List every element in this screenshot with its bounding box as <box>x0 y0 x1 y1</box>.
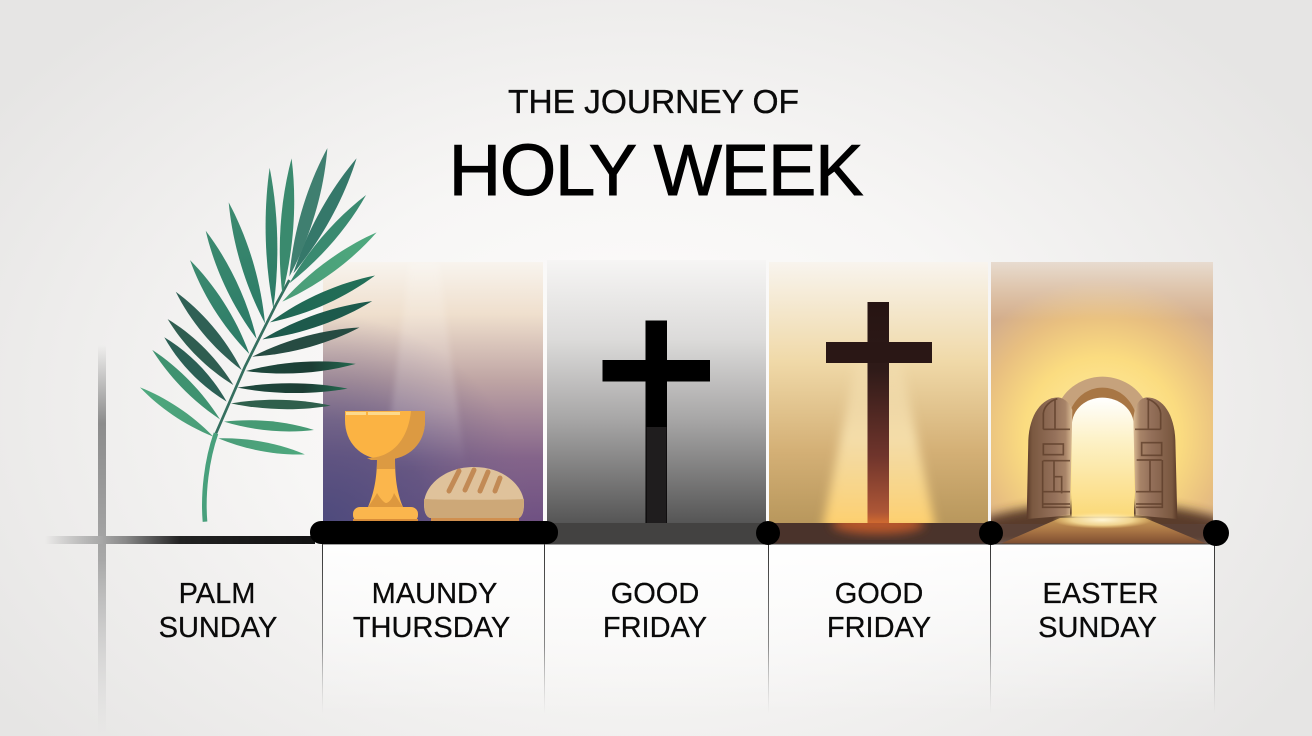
icon: palm branch <box>137 146 380 522</box>
label: Easter Sunday: EASTER <box>1042 578 1159 610</box>
label: Palm Sunday <box>159 578 277 644</box>
panel: Good Friday light <box>769 262 988 530</box>
label: Good Friday: GOOD <box>611 578 699 610</box>
timeline dot: Good Friday end <box>979 521 1003 545</box>
icon: bread loaf <box>424 467 524 523</box>
icon: open tomb doors <box>1027 377 1177 529</box>
title <box>449 84 863 211</box>
column tick lines <box>322 544 1215 714</box>
panel: Good Friday dark <box>547 260 766 524</box>
timeline dot: Easter end <box>1203 520 1229 546</box>
timeline dot: Good Friday <box>756 521 780 545</box>
label: Palm Sunday: SUNDAY <box>159 612 277 644</box>
floor glow <box>1052 511 1152 529</box>
vertical axis line <box>98 345 106 736</box>
panel: Easter Sunday <box>985 262 1220 548</box>
label: Maundy Thursday <box>353 578 510 644</box>
label: Good Friday second <box>827 578 931 644</box>
title: THE JOURNEY OF <box>508 84 799 121</box>
door right <box>1133 397 1177 519</box>
timeline lead line <box>45 536 315 544</box>
label: Good Friday second: FRIDAY <box>827 612 931 644</box>
label: Palm Sunday: PALM <box>179 578 255 610</box>
label: Good Friday <box>603 578 707 644</box>
icon: black cross <box>602 320 710 524</box>
label: Good Friday second: GOOD <box>835 578 923 610</box>
timeline base strips <box>322 523 1210 544</box>
title: HOLY WEEK <box>449 130 863 211</box>
icon: chalice <box>345 411 425 523</box>
label: Easter Sunday: SUNDAY <box>1038 612 1157 644</box>
label: Easter Sunday <box>1038 578 1159 644</box>
timeline thick segment <box>310 521 558 544</box>
label: Good Friday: FRIDAY <box>603 612 707 644</box>
label: Maundy Thursday: MAUNDY <box>372 578 497 610</box>
door left <box>1027 397 1072 519</box>
label columns highlight <box>322 544 1214 714</box>
label: Maundy Thursday: THURSDAY <box>353 612 510 644</box>
icon: glowing cross <box>826 302 932 523</box>
panel: Maundy Thursday <box>323 262 543 524</box>
floor <box>985 504 1220 548</box>
